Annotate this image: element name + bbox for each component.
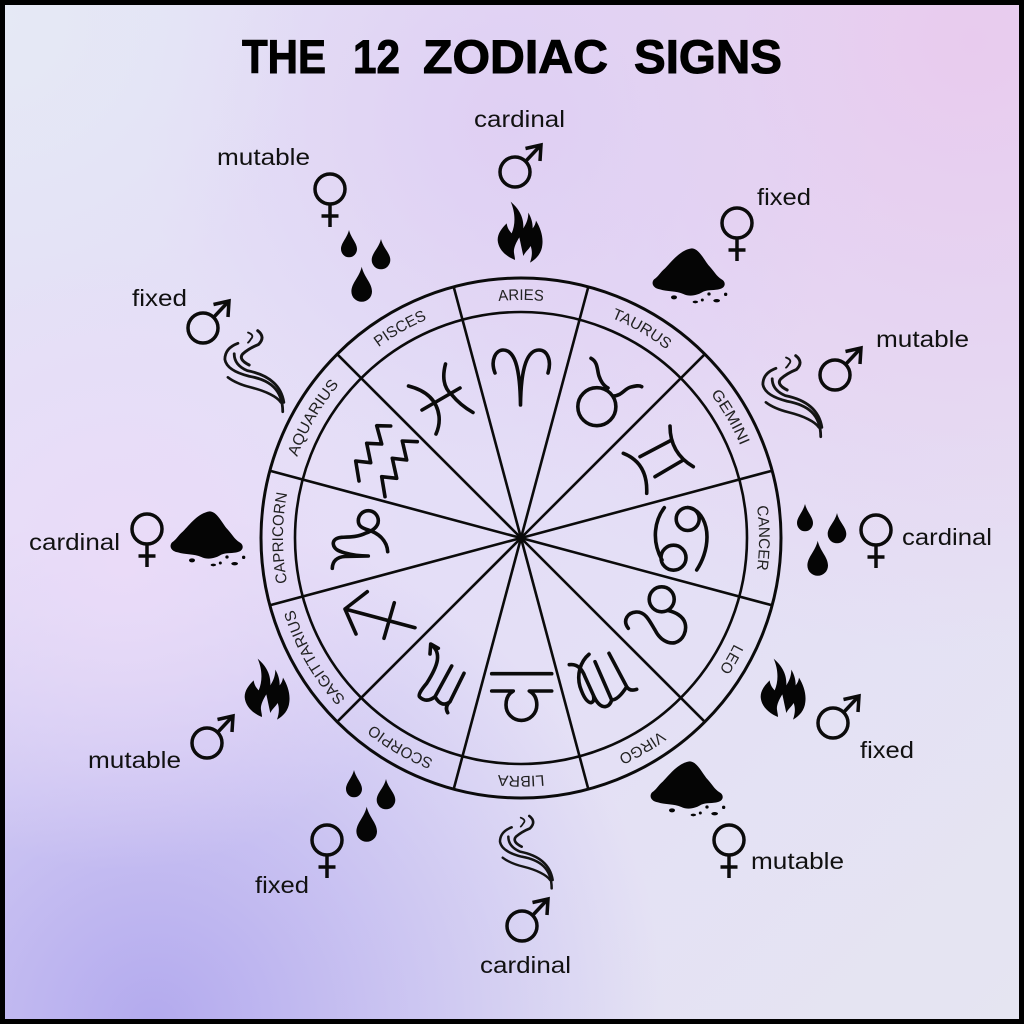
callout: Sagittarius, mutable, Mars, fire <box>88 659 290 773</box>
icon: Mars <box>820 348 861 390</box>
sign name: Leo: LEO <box>721 644 744 674</box>
icon: Venus <box>861 515 891 568</box>
sign name: Gemini: GEMINI <box>713 390 750 444</box>
label: cardinal: cardinal <box>29 529 120 555</box>
label: fixed: fixed <box>132 285 187 311</box>
glyph: Capricorn <box>332 511 388 568</box>
sign name: Aquarius: AQUARIUS <box>288 380 338 457</box>
callout: Taurus, fixed, Venus, earth <box>653 184 811 303</box>
icon: Venus <box>315 174 345 227</box>
label: mutable: mutable <box>217 144 310 170</box>
icon: water <box>346 770 395 842</box>
icon: Mars <box>188 301 229 343</box>
glyph: Pisces <box>408 364 473 434</box>
label: cardinal: cardinal <box>902 524 992 550</box>
title: 12 <box>353 30 400 83</box>
icon: Venus <box>714 825 744 878</box>
glyph: Sagittarius <box>345 592 415 638</box>
icon: fire <box>245 659 290 720</box>
icon: air <box>225 331 284 412</box>
icon: Venus <box>312 825 342 878</box>
icon: earth <box>171 511 245 566</box>
icon: water <box>341 230 390 302</box>
icon: Mars <box>818 696 859 738</box>
sign name: Taurus: TAURUS <box>615 308 671 348</box>
icon: Venus <box>722 208 752 261</box>
label: cardinal: cardinal <box>474 106 565 132</box>
icon: Mars <box>507 899 548 941</box>
sign name: Libra: LIBRA <box>498 775 544 787</box>
sign name: Cancer: CANCER <box>757 506 770 570</box>
icon: Venus <box>132 514 162 567</box>
glyph: Cancer <box>655 508 707 570</box>
title: THE <box>242 30 326 83</box>
callout: Capricorn, cardinal, Venus, earth <box>29 511 245 567</box>
sign name: Capricorn: CAPRICORN <box>272 492 287 583</box>
label: mutable: mutable <box>88 747 181 773</box>
callout: Pisces, mutable, Venus, water <box>217 144 390 302</box>
icon: air <box>500 816 553 888</box>
label: fixed: fixed <box>860 737 914 763</box>
label: fixed: fixed <box>255 872 309 898</box>
callout: Leo, fixed, Mars, fire <box>761 659 914 763</box>
glyph: Virgo <box>569 653 637 707</box>
label: mutable: mutable <box>876 326 969 352</box>
title: SIGNS <box>634 30 782 83</box>
sign name: Aries: ARIES <box>498 289 544 301</box>
glyph: Aries <box>493 350 549 405</box>
sign name: Sagittarius: SAGITTARIUS <box>284 610 344 704</box>
icon: Mars <box>192 716 233 758</box>
label: mutable: mutable <box>751 848 844 874</box>
zodiac wheel <box>260 276 782 800</box>
callout: Libra, cardinal, Mars, air <box>480 816 571 978</box>
glyph: Taurus <box>578 358 642 426</box>
icon: earth <box>653 248 727 303</box>
label: cardinal: cardinal <box>480 952 571 978</box>
title: ZODIAC <box>423 30 608 83</box>
icon: fire <box>761 659 806 720</box>
icon: earth <box>651 761 725 816</box>
sign name: Pisces: PISCES <box>373 310 426 346</box>
glyph: Scorpio <box>419 644 464 713</box>
callout: Aries, cardinal, Mars, fire <box>474 106 565 263</box>
sign name: Scorpio: SCORPIO <box>369 726 432 768</box>
glyph: Aquarius <box>356 426 417 497</box>
sign name: Virgo: VIRGO <box>620 733 667 764</box>
icon: Mars <box>500 145 541 187</box>
glyph: Gemini <box>623 426 693 493</box>
wheel rings and spokes <box>261 278 781 798</box>
icon: water <box>797 504 846 576</box>
glyph: Leo <box>626 587 686 643</box>
callout: Aquarius, fixed, Mars, air <box>132 285 284 412</box>
label: fixed: fixed <box>757 184 811 210</box>
callout: Virgo, mutable, Venus, earth <box>651 761 844 878</box>
icon: air <box>763 356 822 437</box>
callout: Scorpio, fixed, Venus, water <box>255 770 395 898</box>
title <box>242 30 782 83</box>
callout: Gemini, mutable, Mars, air <box>763 326 969 437</box>
glyph: Libra <box>492 674 552 720</box>
icon: fire <box>498 202 543 263</box>
callout: Cancer, cardinal, Venus, water <box>797 504 992 576</box>
